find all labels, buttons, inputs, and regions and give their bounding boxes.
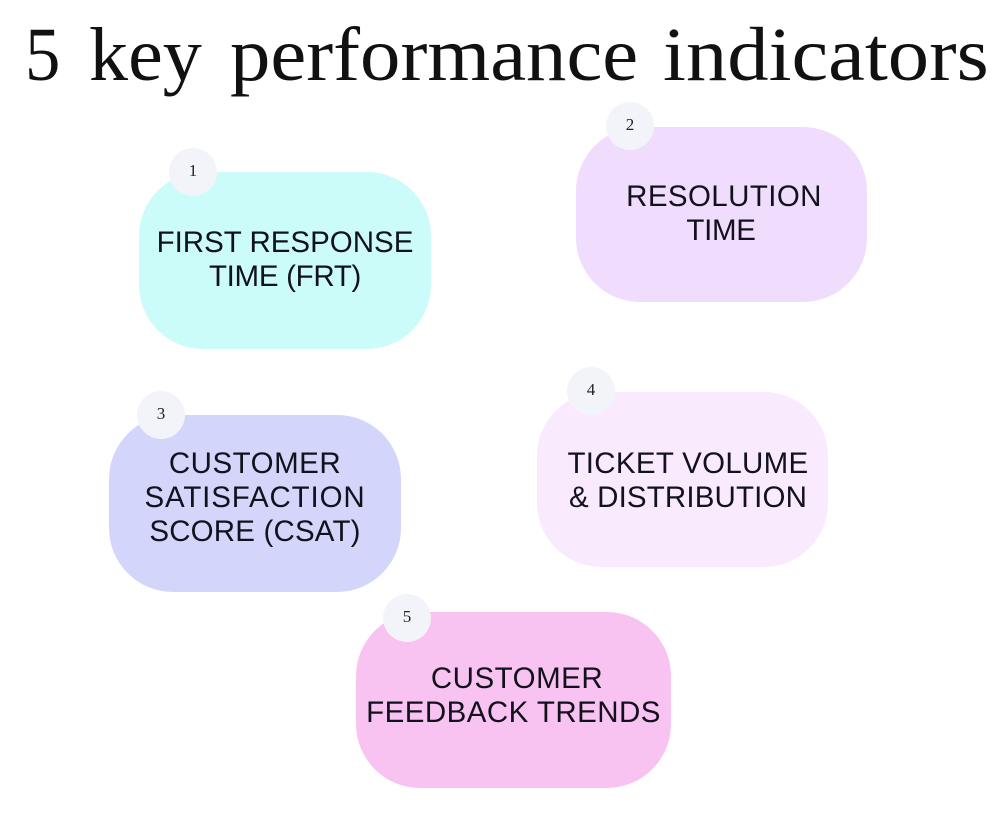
text: ticket volume and distribution [567, 447, 809, 514]
panel: resolution time [576, 127, 867, 302]
text: customer feedback trends: CUSTOMER [431, 662, 603, 695]
panel: customer satisfaction score [109, 415, 401, 592]
text: ticket volume and distribution: TICKET VOLUME [567, 447, 809, 480]
title: performance [230, 13, 638, 97]
title [25, 13, 989, 97]
title: indicators [663, 13, 989, 97]
text: first response time: FIRST RESPONSE [157, 226, 413, 259]
badge 3 [137, 391, 185, 439]
text: customer feedback trends: FEEDBACK TRENDS [366, 696, 661, 729]
title: key [89, 13, 202, 97]
badge 5: 5 [403, 607, 411, 626]
text: customer satisfaction score: CUSTOMER [169, 447, 341, 480]
badge 1 [169, 148, 217, 196]
badge 4: 4 [587, 380, 595, 399]
panel: first response time [139, 172, 431, 349]
panel: ticket volume and distribution [537, 392, 828, 567]
text: customer satisfaction score: SCORE (CSAT) [149, 515, 361, 548]
panel: customer feedback trends [356, 612, 671, 788]
text: resolution time: TIME [686, 214, 756, 247]
badge 2 [606, 102, 654, 150]
badge 4 [567, 367, 615, 415]
text: resolution time [626, 180, 822, 247]
badge 3: 3 [157, 404, 165, 423]
title: 5 [25, 13, 60, 97]
badge 2: 2 [626, 115, 634, 134]
text: resolution time: RESOLUTION [626, 180, 822, 213]
text: customer feedback trends [366, 662, 661, 729]
badge 1: 1 [189, 161, 197, 180]
badge 5 [383, 594, 431, 642]
text: customer satisfaction score [144, 447, 366, 548]
text: first response time: TIME (FRT) [209, 260, 361, 293]
text: first response time [157, 226, 413, 293]
text: ticket volume and distribution: & DISTRIBUTION [569, 481, 807, 514]
text: customer satisfaction score: SATISFACTION [144, 481, 366, 514]
